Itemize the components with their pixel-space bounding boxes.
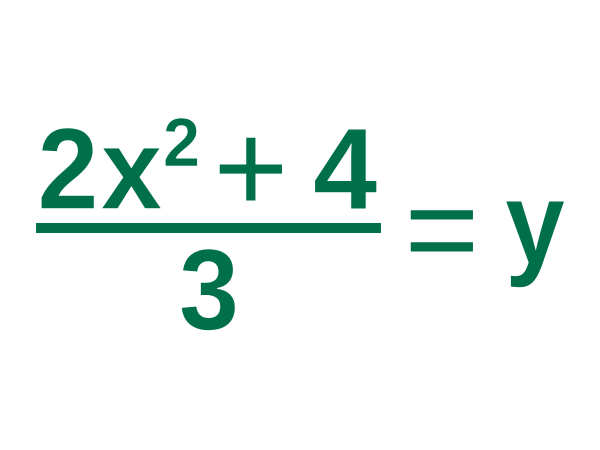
denominator: 3: 3 [179,225,239,354]
variable x: x [101,105,162,233]
variable y: y [505,158,565,288]
exponent 2: 2 [163,104,200,181]
digit 2: 2 [38,104,98,233]
equals sign: = [404,158,479,301]
plus sign: + [214,97,288,240]
digit 4: 4 [313,104,377,233]
fraction bar [36,223,381,233]
numerator: 2x squared plus 4 [38,97,377,240]
